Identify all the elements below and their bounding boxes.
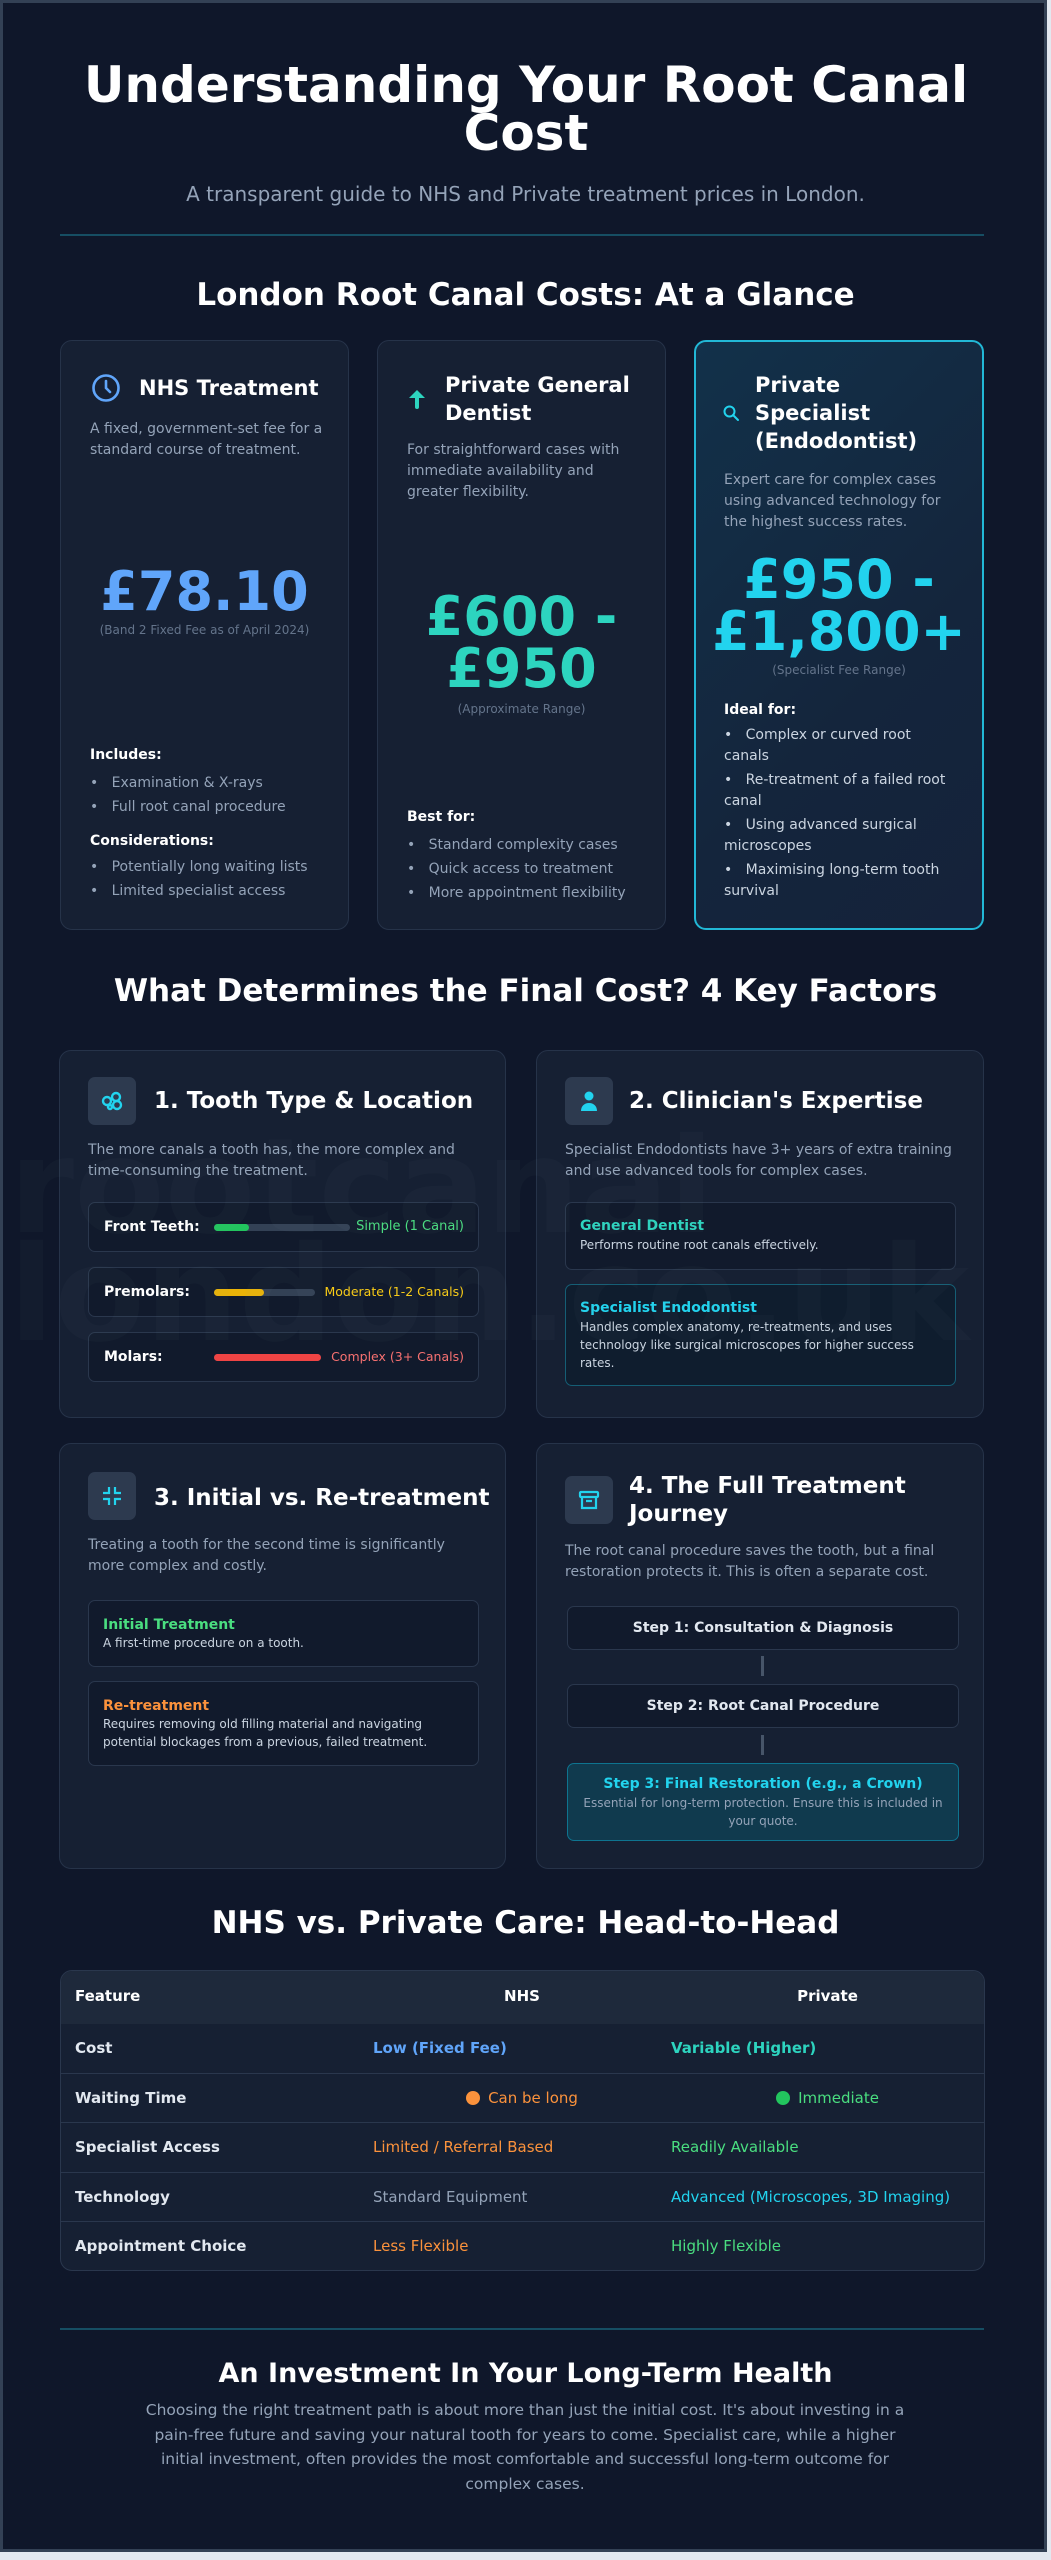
row: premolars: Premolars: xyxy=(104,1284,190,1300)
row: technology: Technology xyxy=(75,2188,170,2206)
row: appointment choice: Highly Flexible xyxy=(671,2237,781,2255)
box: general dentist xyxy=(565,1202,956,1270)
icon: person xyxy=(565,1077,613,1125)
best for list: • More appointment flexibility xyxy=(407,885,626,901)
box: general dentist: General Dentist xyxy=(580,1218,704,1234)
step 2: Step 2: Root Canal Procedure xyxy=(647,1698,879,1714)
box: re-treatment: Requires removing old filling material and navigating potential blockages from a previous, failed treatment. xyxy=(103,1717,427,1749)
includes list: • Examination & X-rays xyxy=(90,775,263,791)
panel: NHS treatment card xyxy=(60,340,349,930)
row: specialist access: Limited / Referral Based xyxy=(373,2138,553,2156)
comparison table xyxy=(60,1970,985,2271)
box: general dentist: Performs routine root canals effectively. xyxy=(580,1238,819,1252)
ideal for list: • Complex or curved root canals xyxy=(724,727,911,764)
row: appointment choice: Less Flexible xyxy=(373,2237,468,2255)
title: Understanding Your Root Canal Cost xyxy=(84,56,968,162)
row: front teeth: Front Teeth: xyxy=(104,1219,200,1235)
box: specialist endodontist: Specialist Endodontist xyxy=(580,1300,757,1316)
watermark xyxy=(9,1133,969,1349)
includes list: • Full root canal procedure xyxy=(90,799,286,815)
price note: (Band 2 Fixed Fee as of April 2024) xyxy=(100,623,309,637)
price note: (Approximate Range) xyxy=(458,702,585,716)
icon: clock xyxy=(92,374,120,402)
row: waiting time: Waiting Time xyxy=(75,2089,186,2107)
ideal for list: • Re-treatment of a failed root canal xyxy=(724,772,945,809)
panel title: 3. Initial vs. Re-treatment xyxy=(154,1485,490,1511)
panel title: 2. Clinician's Expertise xyxy=(629,1088,923,1114)
includes list: Includes: xyxy=(90,747,162,763)
box: specialist endodontist: Handles complex anatomy, re-treatments, and uses technology like surgical microscopes for higher success rates. xyxy=(580,1320,914,1370)
step 3: Step 3: Final Restoration (e.g., a Crown) xyxy=(603,1776,923,1792)
table header: NHS xyxy=(504,1987,540,2005)
includes list: Considerations: xyxy=(90,833,214,849)
row: front teeth xyxy=(88,1202,479,1252)
icon: tooth xyxy=(88,1077,136,1125)
row: waiting time: Immediate xyxy=(798,2089,879,2107)
price: £78.10 xyxy=(100,560,309,623)
row: specialist access: Readily Available xyxy=(671,2138,799,2156)
icon: magnifier xyxy=(724,406,739,421)
watermark: rootcanal xyxy=(9,1110,714,1264)
best for list xyxy=(407,809,626,901)
row: technology xyxy=(61,2172,984,2222)
box: initial treatment: Initial Treatment xyxy=(103,1617,235,1633)
table header xyxy=(61,1971,984,2024)
row: technology: Advanced (Microscopes, 3D Imaging) xyxy=(671,2188,950,2206)
best for list: • Standard complexity cases xyxy=(407,837,618,853)
panel: private general dentist card xyxy=(377,340,666,930)
icon: archive box xyxy=(565,1476,613,1524)
box: initial treatment xyxy=(88,1600,479,1667)
best for list: Best for: xyxy=(407,809,475,825)
price: £950 - xyxy=(743,548,935,611)
panel: clinician expertise xyxy=(536,1050,984,1418)
step 2 xyxy=(567,1684,959,1728)
panel: tooth type xyxy=(59,1050,506,1418)
card heading: Private Specialist (Endodontist) xyxy=(755,373,917,453)
box: re-treatment xyxy=(88,1681,479,1766)
row: technology: Standard Equipment xyxy=(373,2188,527,2206)
price: £950 xyxy=(446,637,597,700)
table header: Private xyxy=(797,1987,858,2005)
panel: full treatment journey xyxy=(536,1443,984,1869)
icon: arrow up xyxy=(409,390,425,409)
subtitle: A transparent guide to NHS and Private treatment prices in London. xyxy=(186,182,865,206)
description: The more canals a tooth has, the more complex and time-consuming the treatment. xyxy=(88,1142,455,1179)
price: £1,800+ xyxy=(712,600,966,663)
description: A fixed, government-set fee for a standard course of treatment. xyxy=(90,421,322,458)
description: Specialist Endodontists have 3+ years of extra training and use advanced tools for complex cases. xyxy=(565,1142,952,1179)
description: Treating a tooth for the second time is significantly more complex and costly. xyxy=(88,1537,445,1574)
box: specialist endodontist xyxy=(565,1284,956,1386)
description: For straightforward cases with immediate availability and greater flexibility. xyxy=(407,442,619,500)
includes list: • Potentially long waiting lists xyxy=(90,859,308,875)
step 1: Step 1: Consultation & Diagnosis xyxy=(633,1620,893,1636)
card heading: Private General Dentist xyxy=(445,373,630,425)
row: molars: Molars: xyxy=(104,1349,163,1365)
step 3 xyxy=(567,1763,959,1841)
row: cost: Variable (Higher) xyxy=(671,2039,816,2057)
row: cost xyxy=(75,2039,816,2057)
heading: at a glance: London Root Canal Costs: At a Glance xyxy=(196,277,855,313)
row: specialist access xyxy=(61,2122,984,2172)
table header: Feature xyxy=(75,1987,140,2005)
row: premolars xyxy=(88,1267,479,1317)
ideal for list: Ideal for: xyxy=(724,702,796,718)
row: waiting time: Can be long xyxy=(488,2089,578,2107)
watermark: london.co.uk xyxy=(9,1218,969,1372)
price xyxy=(426,585,617,700)
panel: initial vs re-treatment xyxy=(59,1443,506,1869)
ideal for list xyxy=(724,702,946,899)
includes list xyxy=(90,747,308,899)
step 3: Essential for long-term protection. Ensure this is included in your quote. xyxy=(583,1796,943,1828)
price xyxy=(712,548,966,663)
row: front teeth: Simple (1 Canal) xyxy=(356,1219,464,1234)
row: premolars: Moderate (1-2 Canals) xyxy=(324,1284,464,1299)
best for list: • Quick access to treatment xyxy=(407,861,613,877)
heading: head-to-head: NHS vs. Private Care: Head-to-Head xyxy=(212,1905,839,1941)
price: £600 - xyxy=(426,585,617,648)
footer heading: An Investment In Your Long-Term Health xyxy=(219,2358,832,2389)
box: re-treatment: Re-treatment xyxy=(103,1698,209,1714)
row: appointment choice: Appointment Choice xyxy=(75,2237,246,2255)
panel title: 4. The Full Treatment Journey xyxy=(629,1473,906,1527)
heading: 4 key factors: What Determines the Final Cost? 4 Key Factors xyxy=(114,973,937,1009)
row: molars xyxy=(88,1332,479,1382)
row: waiting time xyxy=(61,2073,984,2123)
icon: compress arrows xyxy=(88,1472,136,1520)
box: initial treatment: A first-time procedure on a tooth. xyxy=(103,1636,304,1650)
panel: private specialist card xyxy=(694,340,984,930)
panel title: 1. Tooth Type & Location xyxy=(154,1088,473,1114)
step 1 xyxy=(567,1606,959,1650)
description: Expert care for complex cases using advanced technology for the highest success rates. xyxy=(724,472,941,530)
row: appointment choice xyxy=(61,2221,984,2271)
row: molars: Complex (3+ Canals) xyxy=(331,1349,464,1364)
includes list: • Limited specialist access xyxy=(90,883,285,899)
ideal for list: • Maximising long-term tooth survival xyxy=(724,862,939,899)
price note: (Specialist Fee Range) xyxy=(772,663,906,677)
ideal for list: • Using advanced surgical microscopes xyxy=(724,817,917,854)
footer paragraph: Choosing the right treatment path is about more than just the initial cost. It's about investing in a pain-free future and saving your natural tooth for years to come. Specialist care, while a higher initial investment, often provides the most comfortable and successful long-term outcome for complex cases. xyxy=(146,2401,904,2493)
row: cost: Low (Fixed Fee) xyxy=(373,2039,507,2057)
row: specialist access: Specialist Access xyxy=(75,2138,220,2156)
description: The root canal procedure saves the tooth, but a final restoration protects it. This is often a separate cost. xyxy=(565,1543,934,1580)
card heading: NHS Treatment xyxy=(139,376,319,400)
row: cost: Cost xyxy=(75,2039,112,2057)
